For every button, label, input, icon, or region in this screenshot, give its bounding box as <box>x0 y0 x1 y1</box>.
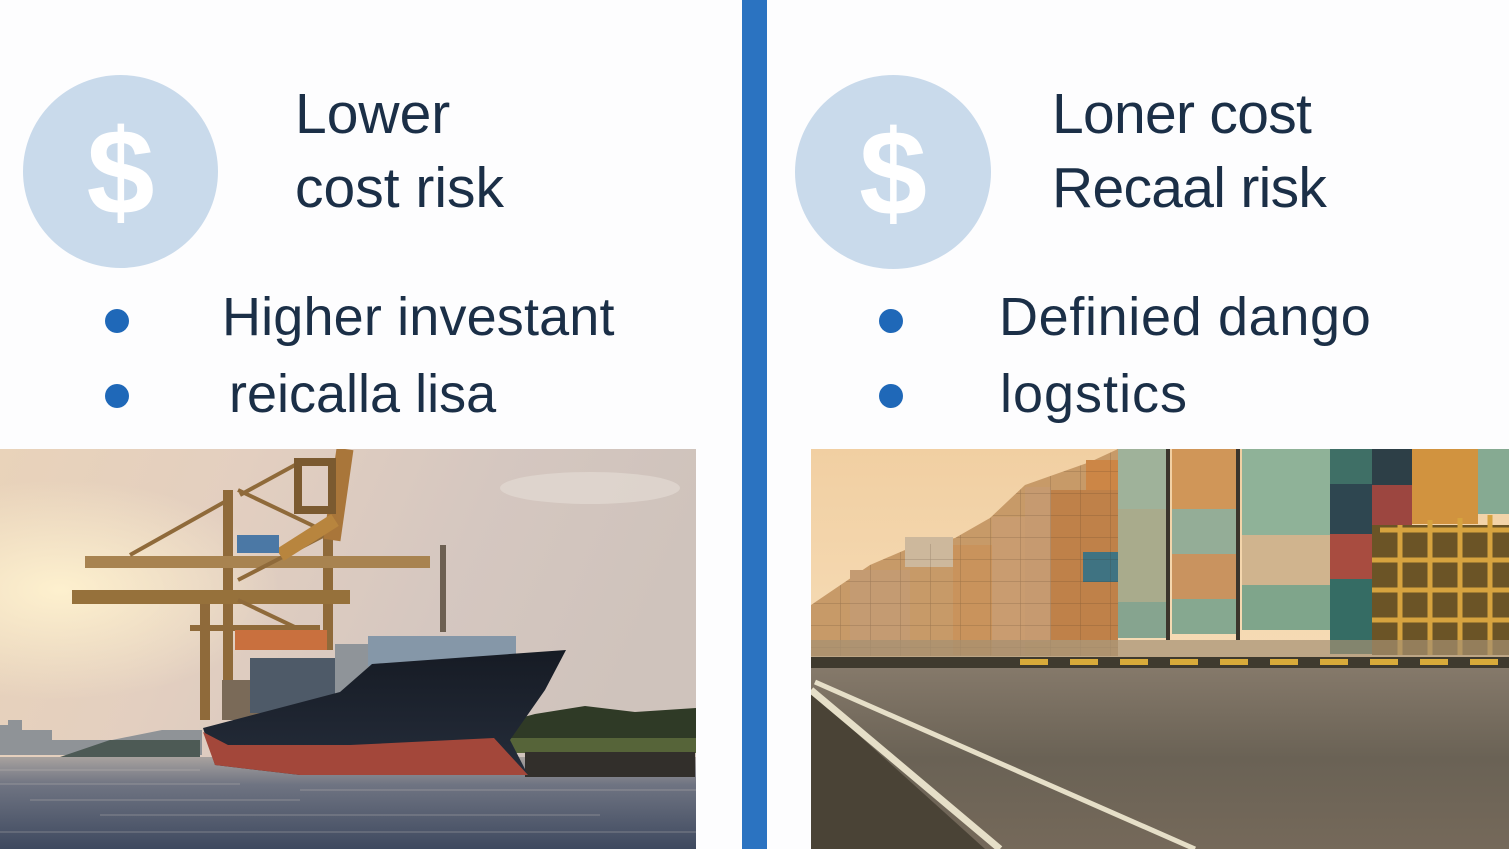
heading: lower cost risk: Lower <box>295 82 450 146</box>
photo: ship at port <box>0 449 696 849</box>
road lines <box>811 682 1195 849</box>
photo: container yard <box>811 449 1509 849</box>
icon: dollar circle right <box>795 75 991 269</box>
container stacks <box>811 449 1509 656</box>
text: logstics: logstics <box>1000 364 1188 424</box>
divider bar <box>742 0 767 849</box>
fence and kerb <box>811 640 1509 668</box>
text: reicalla lisa: reicalla lisa <box>229 364 496 424</box>
icon: dollar circle left: $ <box>87 104 154 240</box>
road <box>811 668 1509 849</box>
bullet dot: right 1 <box>879 309 903 333</box>
bullet dot: left 2 <box>105 384 129 408</box>
heading: lower cost risk: cost risk <box>295 156 504 220</box>
text: definied dango: Definied dango <box>999 287 1371 347</box>
sky <box>811 449 1509 664</box>
bullet dot: right 2 <box>879 384 903 408</box>
sea ripples <box>0 770 696 832</box>
heading: loner cost recaal risk: Loner cost <box>1052 82 1311 146</box>
icon: dollar circle left <box>23 75 218 268</box>
heading: loner cost recaal risk: Recaal risk <box>1052 156 1326 220</box>
heading: lower cost risk <box>295 82 504 220</box>
crane <box>72 449 443 720</box>
sky <box>0 449 696 769</box>
text: higher investant: Higher investant <box>222 287 615 347</box>
ship cargo <box>222 636 516 720</box>
icon: dollar circle right: $ <box>859 105 927 241</box>
heading: loner cost recaal risk <box>1052 82 1327 220</box>
ship hull <box>203 650 566 775</box>
verge <box>811 692 985 849</box>
hull waterline <box>203 732 528 775</box>
quay <box>525 752 695 777</box>
sea <box>0 757 696 849</box>
shoreline <box>0 706 696 757</box>
bullet dot: left 1 <box>105 309 129 333</box>
